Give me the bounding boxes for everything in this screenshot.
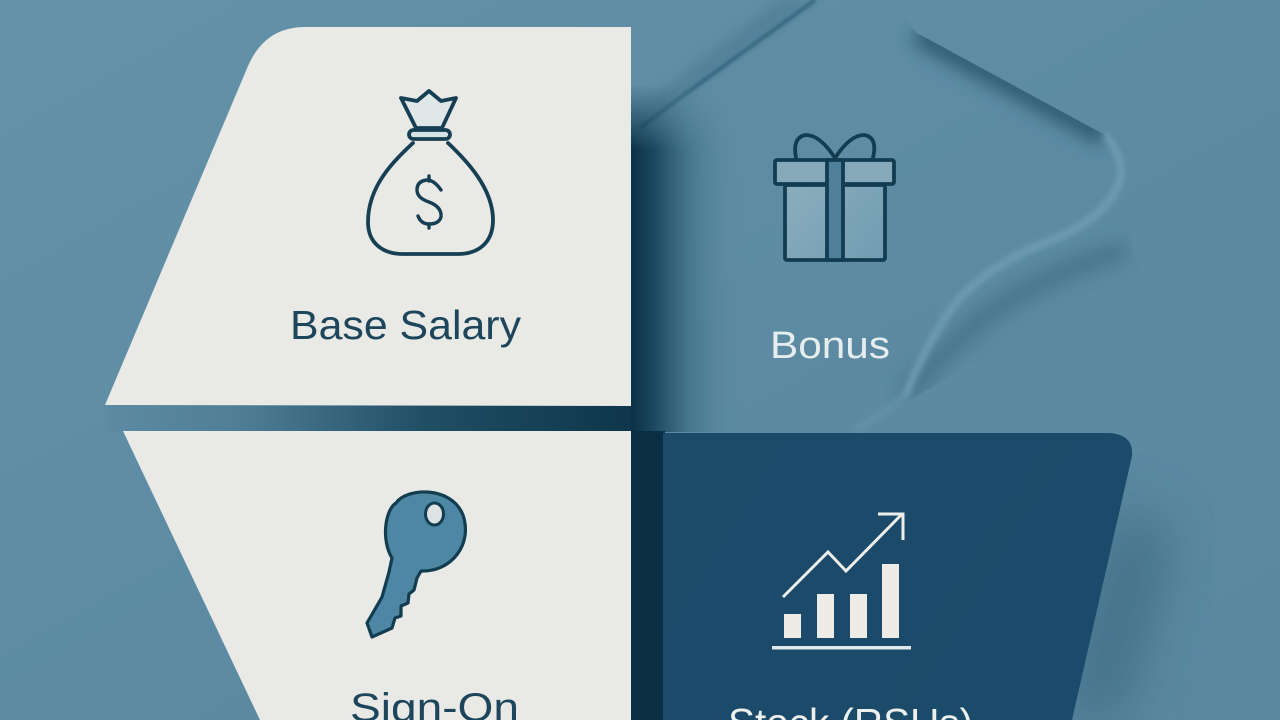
panel: sign-on [123,431,631,720]
icon: key [367,492,465,637]
panel: bonus [631,0,1125,432]
label: bonus: Bonus [770,325,890,367]
vertical gap shadow [631,431,665,720]
panel: stock (RSUs) [663,433,1132,720]
panel: stock shadow [1060,500,1170,720]
icon: money bag [368,91,493,254]
horizontal gap shadow [105,405,631,432]
icon: gift box [775,135,894,260]
icon: rising chart [772,514,911,650]
panel: base salary [105,27,631,406]
label: base salary: Base Salary [290,302,522,348]
